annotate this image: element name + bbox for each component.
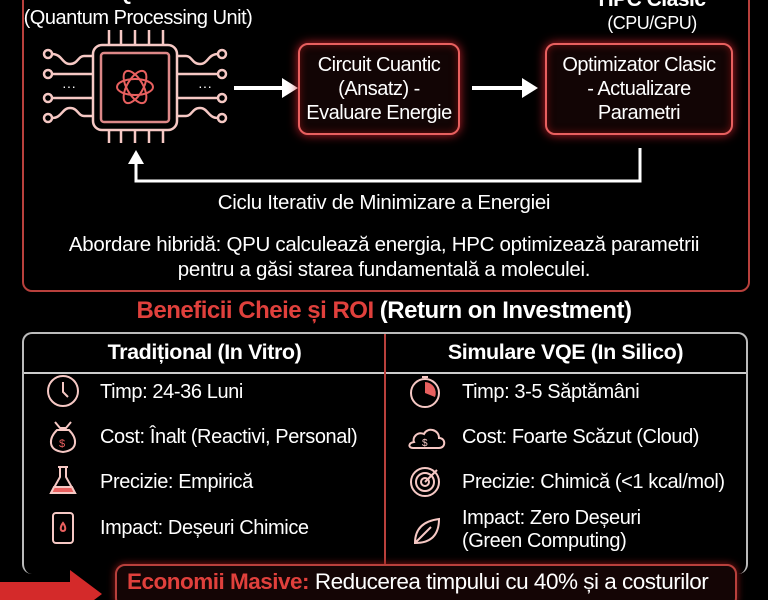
box: circuit: Evaluare Energie [306,102,452,124]
arrow: circuit to optimizer [472,78,538,98]
text: (Green Computing) [462,530,626,552]
icon: quantum chip [42,30,228,143]
icons: right column [408,376,446,544]
box: circuit: (Ansatz) - [338,78,420,100]
panel: hybrid workflow [22,0,750,292]
text: Precizie: Chimică (<1 kcal/mol) [462,471,725,493]
callout: savings [115,564,737,600]
heading: HPC: (CPU/GPU) [607,13,697,33]
box: optimizer [545,43,733,135]
callout: savings: Economii Masive: Reducerea timpului cu 40% și a costurilor [127,569,708,594]
box: optimizer: Optimizator Clasic [562,54,716,76]
text: hybrid approach: pentru a găsi starea fundamentală a moleculei. [178,258,590,281]
heading: HPC [598,0,706,33]
text: Cost: Înalt (Reactivi, Personal) [100,426,357,448]
icon: quantum chip: ··· [198,78,212,94]
arrow: chip to circuit [234,78,298,98]
icon: quantum chip: ··· [62,78,76,94]
header: VQE: Simulare VQE (In Silico) [448,340,683,364]
icons: left column [47,375,79,544]
text: Cost: Foarte Scăzut (Cloud) [462,426,699,448]
icons: left column: $ [59,438,65,450]
box: optimizer: - Actualizare [587,78,691,100]
arrow: red pointer [0,570,102,600]
title: benefits: Beneficii Cheie și ROI (Return on Investment) [137,297,631,324]
text: Impact: Deșeuri Chimice [100,517,309,539]
text: hybrid approach: Abordare hibridă: QPU calculează energia, HPC optimizează parametrii [69,233,699,256]
icons: right column: $ [422,438,428,449]
text: loop caption: Ciclu Iterativ de Minimizare a Energiei [218,191,550,214]
heading: QPU: (Quantum Processing Unit) [24,7,252,29]
table: comparison [22,332,748,574]
header: traditional: Tradițional (In Vitro) [108,340,301,364]
arrow: feedback loop [128,148,642,182]
text: Impact: Zero Deșeuri [462,507,641,529]
box: circuit: Circuit Cuantic [318,54,440,76]
text: right rows: Timp: 3-5 Săptămâni [462,381,639,403]
text: Precizie: Empirică [100,471,253,493]
box: optimizer: Parametri [598,102,680,124]
text: left rows: Timp: 24-36 Luni [100,381,243,403]
box: circuit [298,43,460,135]
text: hybrid approach [68,233,699,281]
